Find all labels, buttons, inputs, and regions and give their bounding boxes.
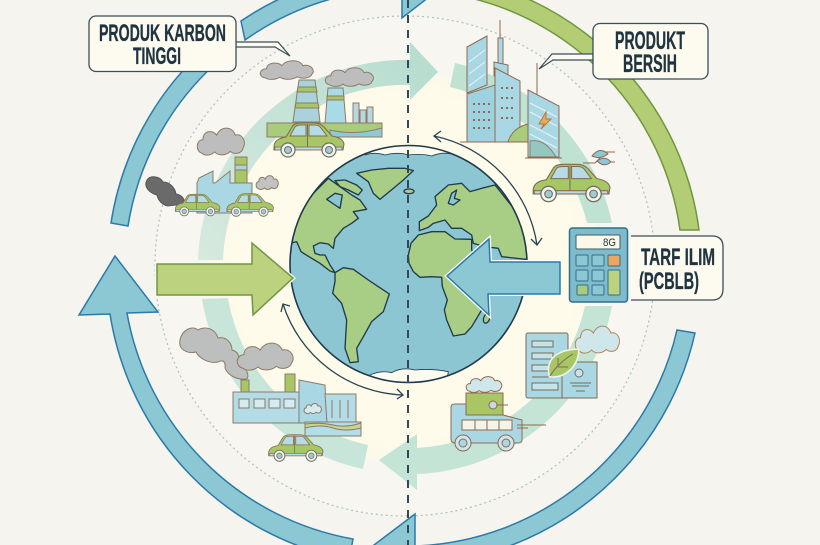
hall windows xyxy=(239,399,295,408)
panel reflections xyxy=(530,103,557,148)
car xyxy=(274,123,344,157)
window dots xyxy=(473,88,516,128)
document xyxy=(526,333,568,398)
callout text line 2: (PCBLB) xyxy=(639,268,699,295)
antarctic cap xyxy=(370,368,449,382)
cream inner disc xyxy=(210,72,600,462)
illustration: factory with cars and smoke xyxy=(146,128,278,216)
left block xyxy=(467,85,495,142)
globe xyxy=(290,140,532,390)
lightning bolt xyxy=(539,112,551,129)
cargo xyxy=(466,393,503,415)
arctic island xyxy=(335,180,362,195)
roof cloud xyxy=(466,376,502,392)
arrow body xyxy=(157,243,293,315)
smoke clouds xyxy=(260,60,314,80)
thin arrow: upper right xyxy=(434,131,542,245)
white halo xyxy=(447,239,560,315)
callout: produk karbon tinggi xyxy=(89,16,290,72)
inner dotted circle xyxy=(155,16,655,516)
illustration: clean city buildings xyxy=(460,20,562,158)
blue arc with arrowhead: lower left xyxy=(79,256,353,545)
document lines xyxy=(532,341,558,390)
greenland xyxy=(357,168,413,199)
keys xyxy=(576,255,620,295)
grey cloud xyxy=(196,128,245,156)
north america xyxy=(290,178,367,273)
thin arrow: lower left xyxy=(281,304,403,399)
callout text line 1: PRODUK KARBON xyxy=(99,20,226,47)
plug leaves xyxy=(592,150,611,165)
iceland xyxy=(404,189,414,194)
main hall xyxy=(233,392,299,423)
callout box xyxy=(631,236,723,300)
glass panel xyxy=(528,90,559,157)
blue arrowhead: bottom xyxy=(370,514,415,545)
small buildings xyxy=(353,103,373,123)
callout text line 1: PRODUKT xyxy=(615,27,685,55)
cooling tower 1 xyxy=(293,80,320,122)
plug xyxy=(583,152,615,163)
right block xyxy=(495,68,520,142)
bus windows xyxy=(462,420,512,430)
hudson bay xyxy=(327,193,342,208)
tower xyxy=(299,380,327,423)
madagascar xyxy=(482,314,490,324)
car xyxy=(533,164,610,202)
card xyxy=(562,362,597,398)
charging plug xyxy=(517,425,546,428)
illustration: electric car xyxy=(533,150,615,202)
green arc: upper right xyxy=(457,0,699,230)
ocean xyxy=(290,146,527,382)
small bush xyxy=(530,141,556,157)
leaf xyxy=(549,350,578,376)
baltic sea xyxy=(448,190,460,205)
callout box xyxy=(89,16,236,72)
central dashed divider xyxy=(407,0,409,545)
callout text line 2: TINGGI xyxy=(133,43,181,70)
ring segment: upper right xyxy=(450,63,612,223)
arctic cap xyxy=(364,146,452,156)
wheels xyxy=(455,435,471,451)
africa xyxy=(408,232,485,336)
tower cloud xyxy=(304,403,322,414)
blue arc: lower right xyxy=(415,330,695,545)
callout tail xyxy=(539,54,593,69)
glass reflections xyxy=(469,50,485,86)
dark smoke xyxy=(146,177,184,206)
chimney xyxy=(235,157,247,183)
south america xyxy=(333,268,389,363)
display digits: 8G xyxy=(603,237,616,249)
globe outline xyxy=(290,146,527,382)
ring segment: upper left with arrowhead xyxy=(198,42,438,260)
chimneys xyxy=(241,374,295,392)
illustration: green bus xyxy=(451,377,546,451)
blue arrowhead: top xyxy=(402,0,429,18)
continents xyxy=(290,140,532,390)
calculator body xyxy=(570,228,628,302)
pale green cycle ring xyxy=(198,42,612,490)
smoke A xyxy=(180,328,248,379)
callout text line 1: TARF ILIM xyxy=(641,244,715,271)
callout text line 2: BERSIH xyxy=(623,50,677,78)
spire xyxy=(500,20,537,97)
arrow body xyxy=(447,239,560,315)
annex xyxy=(325,394,356,423)
cars xyxy=(175,194,220,216)
blue arc: top piece xyxy=(241,0,347,40)
building xyxy=(197,171,252,213)
callout tail xyxy=(236,42,290,56)
outer cycle arrows xyxy=(79,0,699,545)
arrow halo xyxy=(157,243,293,315)
glass tower xyxy=(467,36,487,93)
display xyxy=(576,235,620,249)
green arrow into globe xyxy=(157,243,293,315)
bus body xyxy=(451,404,522,443)
illustration: lower left factory xyxy=(180,328,361,461)
ring segment: lower left xyxy=(202,298,368,469)
small cloud xyxy=(256,175,279,190)
bush xyxy=(508,124,528,142)
ground xyxy=(267,123,382,137)
illustration: power plant with car xyxy=(260,61,382,157)
key xyxy=(489,401,497,409)
cooling tower 2 xyxy=(325,88,346,123)
smoke B xyxy=(236,342,294,371)
car xyxy=(269,435,323,461)
ring segment: lower right with arrowhead xyxy=(379,306,612,490)
water xyxy=(305,422,361,436)
blue arrow into globe xyxy=(447,239,560,315)
callout box xyxy=(593,24,708,79)
callout: tarif ilim xyxy=(631,236,723,300)
cloud xyxy=(574,326,620,354)
eurasia xyxy=(419,183,532,260)
calculator xyxy=(570,228,628,302)
illustration: certificate and leaf xyxy=(526,326,620,398)
ground line xyxy=(460,142,562,158)
callout: produkt bersih xyxy=(539,24,708,79)
blue arc: upper left xyxy=(111,53,214,226)
